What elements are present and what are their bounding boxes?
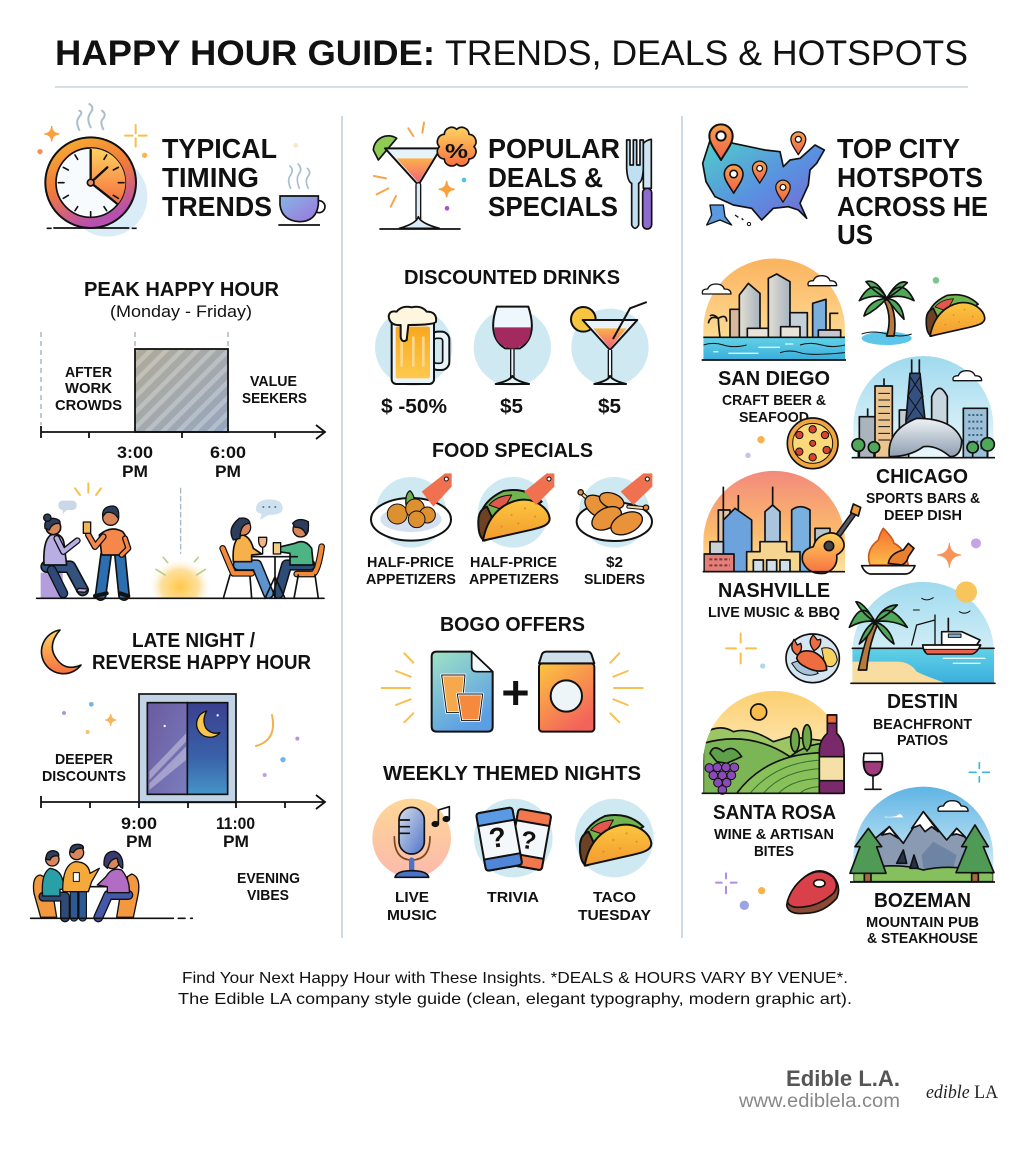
illustration: san diego skyline — [702, 258, 846, 360]
text: destin: BEACHFRONT — [873, 716, 972, 733]
icon: wine glass — [474, 307, 551, 386]
title: HAPPY HOUR GUIDE: — [55, 34, 435, 73]
illustration: destin beach — [849, 581, 995, 683]
labels: drink prices — [381, 396, 621, 418]
heading: popular deals and specials: DEALS & — [488, 162, 603, 193]
labels: food specials: $2 — [606, 554, 623, 571]
text: chicago: DEEP DISH — [884, 507, 962, 524]
labels: food specials: APPETIZERS — [469, 571, 559, 588]
attribution: www.ediblela.com — [738, 1091, 900, 1112]
text: destin: DESTIN — [887, 691, 958, 713]
labels: themed nights: TUESDAY — [578, 907, 651, 924]
title — [55, 34, 968, 73]
labels: food specials: HALF-PRICE — [470, 554, 557, 571]
icon: microphone — [372, 799, 451, 877]
text: nashville: NASHVILLE — [718, 580, 830, 602]
icon: taco with tag — [478, 473, 554, 548]
icon: martini — [571, 302, 649, 386]
text: percent symbol on badge: % — [445, 141, 468, 163]
text: san diego — [718, 368, 830, 426]
chart: peak happy hour timeline: 3:00 — [117, 443, 153, 462]
icon: fork and knife — [627, 139, 652, 229]
heading: typical timing trends: TRENDS — [162, 191, 272, 222]
heading: peak happy hour: PEAK HAPPY HOUR — [84, 279, 280, 301]
labels: food specials: HALF-PRICE — [367, 554, 454, 571]
text: nashville — [708, 580, 840, 621]
attribution: Edible L.A. — [786, 1066, 900, 1091]
illustration: santa rosa vineyard — [702, 691, 845, 794]
text: san diego: SEAFOOD — [739, 409, 809, 426]
chart: late night timeline: PM — [126, 832, 152, 851]
heading: top city hotspots: US — [837, 219, 873, 250]
chart: late night timeline: PM — [223, 832, 249, 851]
chart: late night timeline: 11:00 — [216, 814, 255, 833]
footer note: The Edible LA company style guide (clean, elegant typography, modern graphic art). — [178, 991, 852, 1008]
logo: edible LA: edible LA — [926, 1082, 998, 1103]
heading: top city hotspots: HOTSPOTS — [837, 162, 983, 193]
chart: peak happy hour timeline: AFTER — [65, 364, 112, 381]
text: question marks — [487, 821, 538, 856]
labels: food specials: SLIDERS — [584, 571, 645, 588]
icon: crescent moon — [41, 630, 81, 674]
chart: peak happy hour timeline: VALUE — [250, 373, 297, 390]
heading: popular deals and specials — [488, 133, 620, 222]
heading: weekly themed nights: WEEKLY THEMED NIGHTS — [383, 763, 641, 785]
footer note: Find Your Next Happy Hour with These Insights. *DEALS & HOURS VARY BY VENUE*. — [182, 970, 848, 987]
text: bozeman: BOZEMAN — [874, 890, 971, 912]
icon: steak and sparkles — [716, 871, 839, 914]
icon: trivia cards — [474, 799, 553, 877]
icon: chicken plate with tag — [577, 473, 652, 548]
title: TRENDS, DEALS & HOTSPOTS — [445, 34, 968, 73]
icon: cocktail with discount badge — [373, 123, 476, 229]
heading: food specials: FOOD SPECIALS — [432, 440, 593, 462]
heading: peak happy hour: (Monday - Friday) — [110, 303, 252, 321]
icon: appetizers plate with tag — [371, 473, 452, 548]
group: food special icons — [371, 473, 652, 548]
labels: food specials: APPETIZERS — [366, 571, 456, 588]
panel: popular deals and specials — [366, 123, 654, 924]
illustration: bozeman mountains — [850, 787, 995, 882]
label: evening vibes: EVENING — [237, 870, 300, 887]
chart: peak happy hour timeline: SEEKERS — [242, 390, 307, 407]
labels: themed nights: TRIVIA — [487, 889, 539, 906]
icon: us map with pins — [703, 124, 824, 226]
chart: peak happy hour timeline: 6:00 — [210, 443, 246, 462]
icon: clock with steam and sparkles — [37, 104, 147, 237]
subpanel: late night reverse happy hour — [31, 630, 325, 918]
panel: top city hotspots — [702, 124, 995, 947]
icon: palm and taco — [859, 277, 985, 345]
label: evening vibes — [237, 870, 300, 904]
icon: seafood plate and sparkle — [726, 633, 839, 683]
icon: flame grilled plate — [862, 528, 981, 574]
chart: late night timeline — [41, 751, 325, 851]
icon: beer mug — [375, 307, 452, 386]
group: themed night icons — [372, 799, 654, 877]
attribution — [738, 1066, 900, 1112]
text: bozeman: & STEAKHOUSE — [867, 930, 978, 947]
labels: food specials — [366, 554, 645, 588]
heading: bogo offers: BOGO OFFERS — [440, 614, 585, 636]
labels: drink prices: $ -50% — [381, 396, 447, 418]
labels: themed nights: TACO — [593, 889, 636, 906]
heading: peak happy hour — [84, 279, 280, 321]
footer note — [178, 970, 852, 1008]
icon: taco tuesday — [575, 799, 654, 877]
icon: pizza — [745, 418, 838, 469]
heading: late night: LATE NIGHT / — [132, 630, 255, 652]
label: evening vibes: VIBES — [247, 887, 289, 904]
text: san diego: SAN DIEGO — [718, 368, 830, 390]
text: bozeman: MOUNTAIN PUB — [866, 914, 979, 931]
text: destin — [873, 691, 972, 749]
panel: typical timing trends — [31, 104, 325, 918]
chart: peak happy hour timeline: PM — [215, 462, 241, 481]
illustration: night window with stars — [62, 694, 299, 802]
illustration: people socialising — [37, 483, 324, 619]
text: santa rosa — [713, 802, 836, 860]
labels: themed nights: LIVE — [395, 889, 429, 906]
icon: coffee cup — [278, 143, 325, 225]
illustration: group at table — [31, 844, 192, 918]
heading: popular deals and specials: POPULAR — [488, 133, 620, 164]
illustration: nashville skyline with guitar — [703, 471, 861, 574]
chart: late night timeline: DISCOUNTS — [42, 768, 126, 785]
text: chicago — [866, 466, 980, 524]
heading: popular deals and specials: SPECIALS — [488, 191, 618, 222]
text: san diego: CRAFT BEER & — [722, 392, 826, 409]
text: destin: PATIOS — [897, 732, 948, 749]
illustration: chicago skyline — [852, 356, 995, 458]
heading: top city hotspots — [837, 133, 988, 250]
heading: late night — [92, 630, 312, 674]
chart: late night timeline: 9:00 — [121, 814, 157, 833]
heading: discounted drinks: DISCOUNTED DRINKS — [404, 267, 620, 289]
text: question marks: ? — [487, 821, 508, 854]
chart: peak happy hour timeline: PM — [122, 462, 148, 481]
labels: drink prices: $5 — [598, 396, 621, 418]
heading: top city hotspots: ACROSS HE — [837, 191, 988, 222]
heading: typical timing trends — [162, 133, 277, 222]
chart: peak happy hour timeline: CROWDS — [55, 397, 122, 414]
text: santa rosa: BITES — [754, 843, 794, 860]
group: discounted drinks icons — [375, 302, 649, 386]
labels: themed nights — [387, 889, 651, 924]
text: chicago: SPORTS BARS & — [866, 490, 980, 507]
chart: peak happy hour timeline — [41, 332, 325, 481]
chart: late night timeline: DEEPER — [55, 751, 113, 768]
heading: top city hotspots: TOP CITY — [837, 133, 960, 164]
text: santa rosa: SANTA ROSA — [713, 802, 836, 824]
text: nashville: LIVE MUSIC & BBQ — [708, 604, 840, 621]
labels: themed nights: MUSIC — [387, 907, 437, 924]
labels: drink prices: $5 — [500, 396, 523, 418]
heading: late night: REVERSE HAPPY HOUR — [92, 652, 312, 674]
heading: typical timing trends: TIMING — [162, 162, 259, 193]
icon: small wine glass and sparkle — [863, 753, 989, 789]
heading: typical timing trends: TYPICAL — [162, 133, 277, 164]
text: santa rosa: WINE & ARTISAN — [714, 826, 834, 843]
icon: bogo drinks and box — [382, 652, 643, 732]
chart: peak happy hour timeline: WORK — [65, 380, 112, 397]
text: bozeman — [866, 890, 979, 947]
text: chicago: CHICAGO — [876, 466, 968, 488]
text: question marks: ? — [519, 826, 538, 856]
